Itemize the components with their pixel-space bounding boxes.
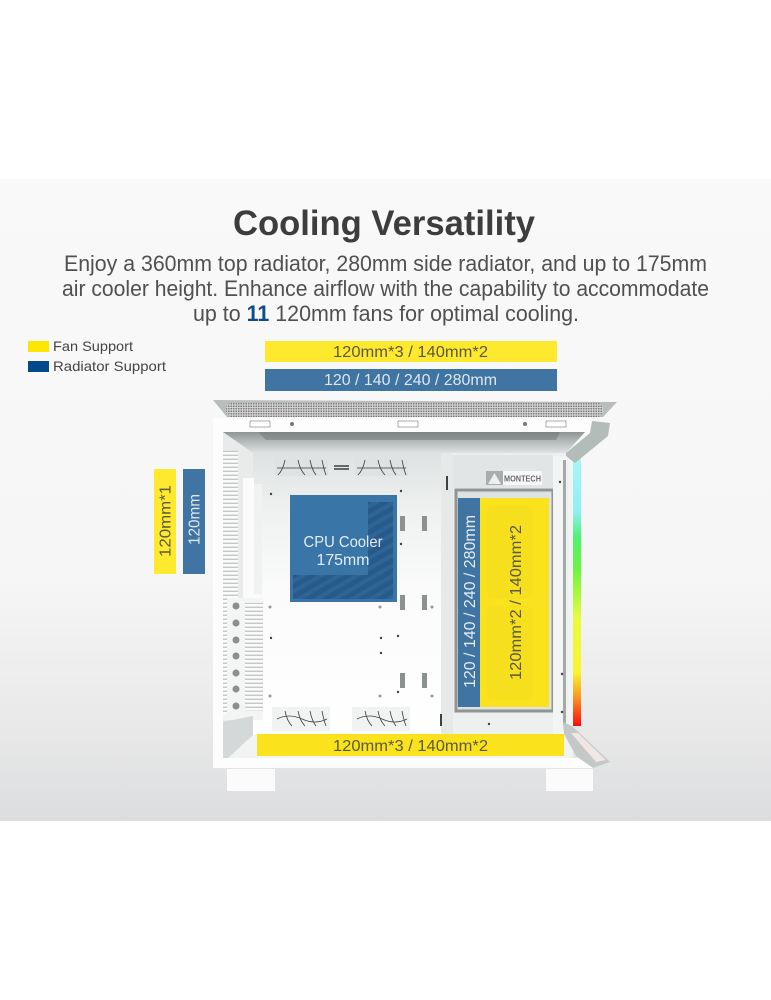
description text (62, 251, 709, 326)
expansion slots (218, 598, 263, 758)
top radiator support bar: 120 / 140 / 240 / 280mm (324, 372, 497, 389)
top right hinge (566, 421, 610, 463)
description text: Enjoy a 360mm top radiator, 280mm side radiator, and up to 175mm (64, 251, 707, 276)
CPU cooler zone: CPU Cooler (304, 534, 383, 551)
case interior (223, 432, 573, 758)
bottom fan support zone: 120mm*3 / 140mm*2 (333, 738, 488, 755)
top white strip (213, 418, 592, 432)
description text: air cooler height. Enhance airflow with the capability to accommodate (62, 276, 709, 301)
background panel (0, 179, 771, 821)
side radiator support zone (458, 498, 480, 707)
top radiator support bar (265, 369, 557, 391)
bottom white strip (213, 758, 593, 768)
side fan support zone: 120mm*2 / 140mm*2 (508, 525, 525, 680)
side fan support zone (480, 498, 549, 707)
Montech badge (486, 471, 542, 485)
rear radiator support bar: 120mm (186, 494, 204, 545)
legend: Radiator Support (53, 358, 166, 374)
right bay (441, 453, 568, 734)
top panel lid (213, 400, 617, 417)
legend: Fan Support (53, 338, 133, 354)
top fan support bar (265, 341, 557, 362)
rear radiator support bar (183, 469, 205, 574)
side radiator support zone: 120 / 140 / 240 / 280mm (462, 515, 479, 688)
description text: up to 11 120mm fans for optimal cooling. (193, 301, 579, 326)
motherboard tray (253, 453, 441, 735)
Montech badge: MONTECH (504, 474, 541, 484)
rear fan support bar (154, 469, 176, 574)
bottom fan support zone (257, 734, 564, 756)
bottom right glass frame (563, 722, 610, 768)
PC case illustration (213, 400, 617, 791)
CPU cooler zone: 175mm (316, 552, 370, 569)
rear wall vents (223, 450, 238, 600)
fan slots bottom (272, 707, 410, 731)
CPU cooler zone (290, 495, 397, 602)
title: Cooling Versatility (233, 204, 536, 243)
fan slots top (275, 457, 408, 476)
rear fan support bar: 120mm*1 (158, 485, 174, 557)
feet (227, 769, 275, 791)
tray mounting holes (268, 476, 563, 726)
legend (28, 338, 166, 374)
left pillar (213, 421, 223, 768)
top fan support bar: 120mm*3 / 140mm*2 (333, 344, 488, 361)
rainbow light strip (572, 458, 581, 726)
